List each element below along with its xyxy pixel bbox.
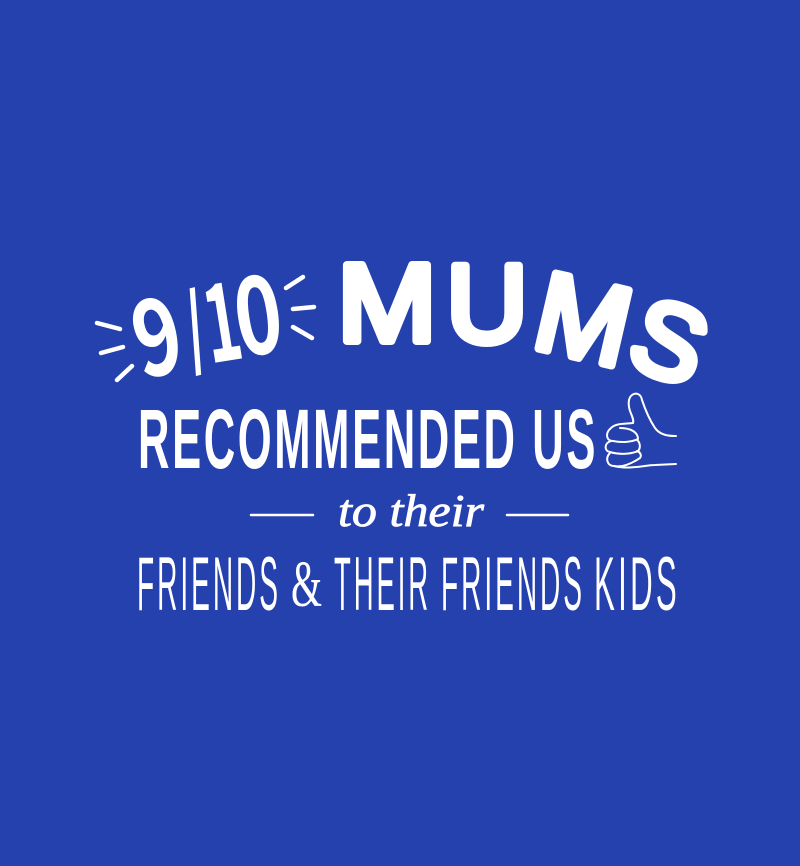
text: friends and their friends kids: THEIR <box>334 542 431 627</box>
icon: thumbs up <box>606 394 676 468</box>
headline: 9/10 with burst lines <box>97 228 314 410</box>
number 9/10: 1 <box>191 235 251 395</box>
number 9/10 <box>116 228 291 410</box>
headline: MUMS: S <box>616 274 723 409</box>
divider: left <box>251 514 313 516</box>
number 9/10: / <box>169 257 218 386</box>
headline: MUMS: M <box>338 242 436 365</box>
headline: MUMS <box>338 242 723 409</box>
text: to their: to their <box>338 485 485 536</box>
text: friends and their friends kids: FRIENDS <box>137 542 281 627</box>
text: KIDS <box>594 542 680 627</box>
text: friends and their friends kids: & <box>291 548 322 621</box>
headline: MUMS: U <box>446 242 528 366</box>
headline: MUMS: M <box>524 248 643 391</box>
number 9/10: 0 <box>223 228 291 388</box>
number 9/10: 9 <box>116 250 195 410</box>
burst lines <box>97 277 314 380</box>
divider: right <box>507 514 568 516</box>
